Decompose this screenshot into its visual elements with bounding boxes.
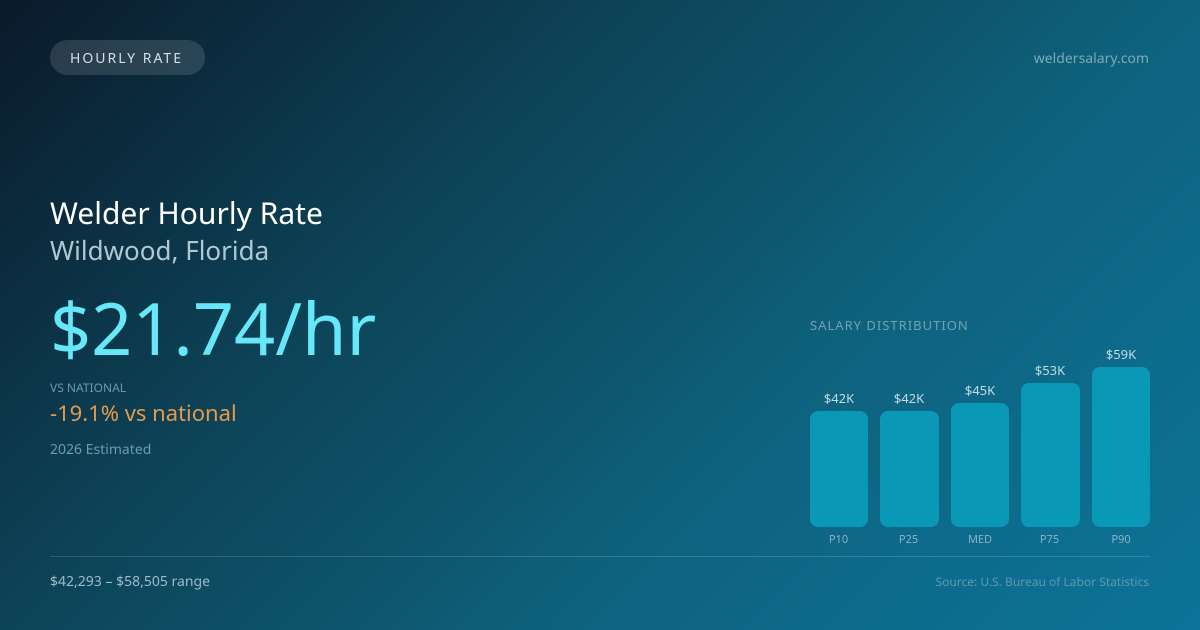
value P25: $42K [894,389,924,407]
title: Welder Hourly Rate [50,192,323,233]
label MED: MED [968,532,992,547]
label P90: P90 [1111,532,1131,547]
salary range: $42,293 – $58,505 range [50,572,210,591]
headline rate: $21.74/hr [50,279,376,377]
badge: hourly rate [50,40,205,75]
bar P25 [880,411,939,527]
value P90: $59K [1106,345,1136,363]
value P75: $53K [1035,361,1065,379]
label P75: P75 [1040,532,1059,547]
value P10: $42K [824,389,854,407]
bar P10 [810,411,868,527]
label P10: P10 [829,532,848,547]
bar MED [951,403,1009,527]
bar P75 [1021,383,1080,527]
site name: weldersalary.com [1034,49,1149,68]
comparison label: VS NATIONAL [50,379,126,396]
chart heading: SALARY DISTRIBUTION [810,316,969,334]
chart: salary distribution [810,316,1150,547]
comparison value: -19.1% vs national [50,398,237,428]
source note: Source: U.S. Bureau of Labor Statistics [936,573,1149,590]
badge label: HOURLY RATE [70,49,183,68]
label P25: P25 [899,532,918,547]
year note: 2026 Estimated [50,440,151,459]
bar P90 [1092,367,1150,527]
subtitle: location: Wildwood, Florida [50,232,269,268]
value MED: $45K [965,381,995,399]
